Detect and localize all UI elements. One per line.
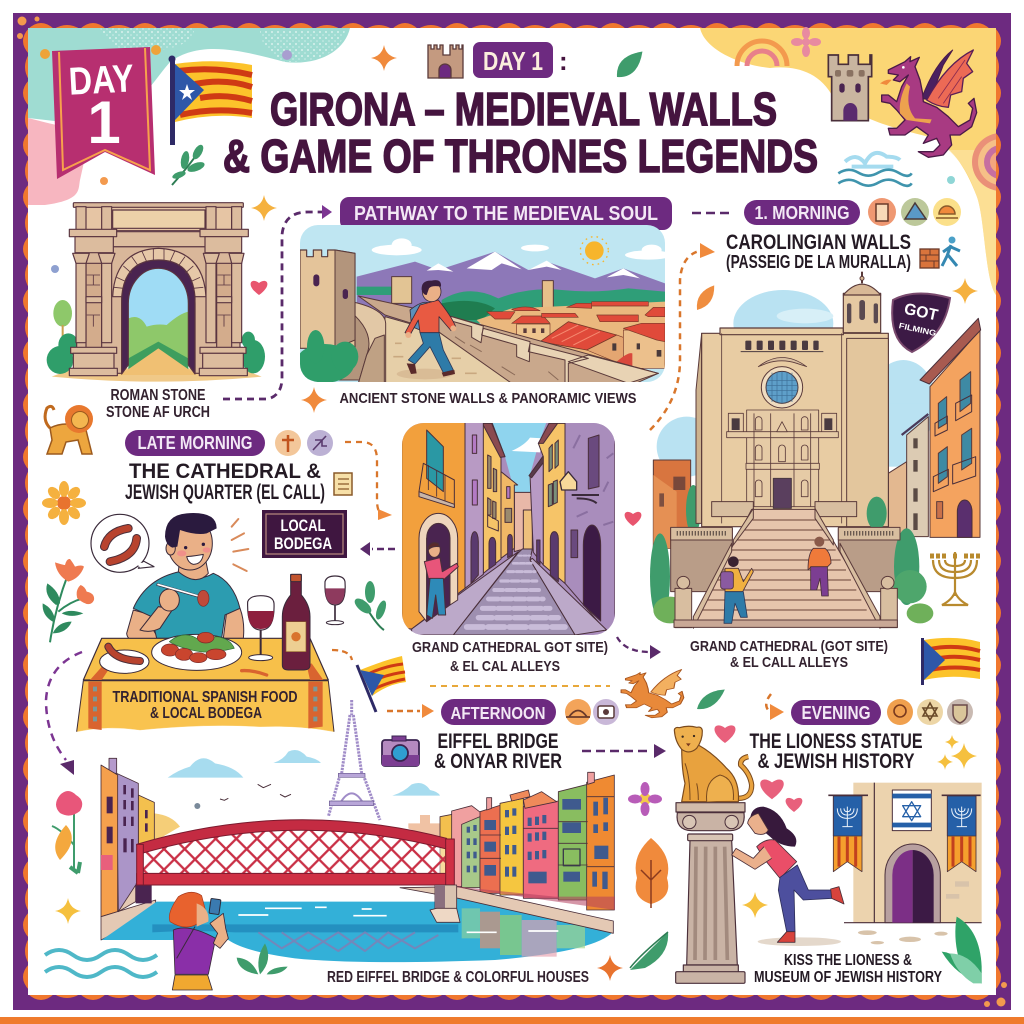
decoration: center flower, tree and leaf xyxy=(628,782,668,970)
icons: sparkles xyxy=(937,735,977,770)
banner: Day 1: DAY xyxy=(68,57,135,104)
illustration: Roman arch xyxy=(47,203,265,382)
icon: scroll xyxy=(334,473,352,495)
background colour blobs xyxy=(28,27,1024,295)
sparkle and heart xyxy=(251,195,327,413)
caption: alley: & EL CAL ALLEYS xyxy=(450,658,560,675)
icon: leaf xyxy=(611,46,648,83)
table caption xyxy=(112,689,298,722)
icons: sprig and heart near alley xyxy=(352,512,641,630)
icons: morning xyxy=(868,198,961,226)
icon: autumn leaf xyxy=(692,282,719,313)
illustration: city walls and panorama xyxy=(295,220,672,387)
caption: lioness xyxy=(754,952,942,986)
icon: flag right xyxy=(921,638,980,685)
heading pill: Day 1: DAY 1 xyxy=(483,46,543,76)
banner: Day 1 xyxy=(40,45,161,179)
arrow: alley to right caption xyxy=(617,637,661,659)
pill: evening: EVENING xyxy=(802,703,870,723)
caption: grand cathedral right: & EL CALL ALLEYS xyxy=(730,654,848,671)
illustration: man eating with food table xyxy=(43,513,345,732)
icon: sunflower xyxy=(42,481,86,525)
icon: camera xyxy=(382,736,419,766)
illustration: alley xyxy=(402,422,615,635)
pill: afternoon xyxy=(441,699,556,725)
banner: Day 1: 1 xyxy=(87,89,121,156)
caption: Roman arch: STONE AF URCH xyxy=(106,404,210,421)
heading: Cathedral and Jewish Quarter xyxy=(125,460,325,504)
icon: dragon xyxy=(880,50,977,157)
sign: local bodega: BODEGA xyxy=(274,534,332,553)
arrow: table to afternoon xyxy=(332,650,352,660)
table caption: TRADITIONAL SPANISH FOOD xyxy=(112,689,298,706)
icon: bricks and walker xyxy=(920,236,960,268)
caption: Roman arch: ROMAN STONE xyxy=(110,387,206,404)
arrow: walls to cathedral route xyxy=(650,243,715,430)
dashed connector and dragon xyxy=(430,670,684,718)
icon: flag center xyxy=(357,656,406,712)
pill: pathway xyxy=(340,197,672,230)
icon: castle xyxy=(428,45,463,78)
heading: Lioness statue xyxy=(750,730,922,773)
caption: alley xyxy=(412,639,608,675)
decoration: left flowers xyxy=(45,791,157,977)
heading: Eiffel Bridge: EIFFEL BRIDGE xyxy=(438,730,558,753)
heading: Lioness statue: & JEWISH HISTORY xyxy=(758,750,914,773)
heading: Carolingian walls: CAROLINGIAN WALLS xyxy=(726,231,911,254)
dashed connector to morning xyxy=(692,212,734,214)
arrow: to lioness xyxy=(582,744,666,758)
caption: bridge: RED EIFFEL BRIDGE & COLORFUL HOUSES xyxy=(327,969,589,986)
icon: tower xyxy=(828,55,872,121)
icon: waves xyxy=(838,153,912,186)
heading: Eiffel Bridge: & ONYAR RIVER xyxy=(434,750,562,773)
arrow: arch to pathway xyxy=(223,205,332,399)
pill: pathway: PATHWAY TO THE MEDIEVAL SOUL xyxy=(354,203,658,225)
pill: afternoon: AFTERNOON xyxy=(450,703,546,723)
illustration: grand cathedral xyxy=(650,272,981,628)
caption: Roman arch xyxy=(106,387,210,421)
sign: local bodega: LOCAL xyxy=(280,516,326,535)
arrow: dashed to alley xyxy=(345,442,392,520)
heading: Carolingian walls xyxy=(726,231,911,272)
title: GIRONA – MEDIEVAL WALLS xyxy=(270,83,777,135)
pill: late morning: LATE MORNING xyxy=(138,433,252,453)
table caption: & LOCAL BODEGA xyxy=(150,705,262,722)
heading: Lioness statue: THE LIONESS STATUE xyxy=(750,730,922,753)
heading pill: Day 1 xyxy=(473,42,568,78)
caption: lioness: MUSEUM OF JEWISH HISTORY xyxy=(754,969,942,986)
caption: grand cathedral right: GRAND CATHEDRAL (GOT SITE) xyxy=(690,638,888,655)
heading: Carolingian walls: (PASSEIG DE LA MURALLA) xyxy=(726,252,911,272)
arrow: to evening xyxy=(766,694,784,720)
icons: afternoon xyxy=(565,699,619,725)
icon: leaf pair xyxy=(694,685,728,714)
heading: Eiffel Bridge xyxy=(434,730,562,773)
heading: Cathedral and Jewish Quarter: THE CATHEDRAL & xyxy=(129,460,321,483)
heading: Cathedral and Jewish Quarter: JEWISH QUARTER (EL CALL) xyxy=(125,481,325,504)
caption: grand cathedral right xyxy=(690,638,888,671)
decoration: sparkle xyxy=(597,955,623,981)
sign: local bodega xyxy=(262,510,347,558)
pill: evening xyxy=(791,700,881,725)
arrow: table to bridge xyxy=(46,652,82,775)
icon: green sprig xyxy=(171,143,206,185)
icon: orange sparkle xyxy=(371,45,397,71)
illustration: lioness, column and woman xyxy=(674,726,982,983)
badge: GoT filming: GOT xyxy=(903,301,940,324)
heading pill: Day 1: : xyxy=(559,46,568,76)
title: & GAME OF THRONES LEGENDS xyxy=(223,130,818,182)
arrow: to afternoon xyxy=(387,704,434,718)
icon: menorah xyxy=(930,552,980,605)
icons: late morning xyxy=(275,430,333,456)
icons: evening xyxy=(887,699,973,725)
badge: GoT filming xyxy=(892,293,950,352)
pill: late morning xyxy=(125,430,265,456)
caption: alley: GRAND CATHEDRAL GOT SITE) xyxy=(412,639,608,656)
title xyxy=(223,83,818,182)
decoration: hearts and sparkle xyxy=(715,725,802,918)
pill: morning: 1. MORNING xyxy=(754,203,850,223)
icon: Catalan flag xyxy=(168,56,252,145)
arrow: alley to bodega xyxy=(360,542,395,556)
caption: walls: ANCIENT STONE WALLS & PANORAMIC VIEWS xyxy=(340,390,636,407)
caption: lioness: KISS THE LIONESS & xyxy=(784,952,912,969)
icon: gold sparkle xyxy=(952,278,978,304)
badge: GoT filming: FILMING xyxy=(898,321,937,338)
illustration: Eiffel bridge and colourful houses xyxy=(101,700,615,990)
icon: lion xyxy=(45,405,93,454)
